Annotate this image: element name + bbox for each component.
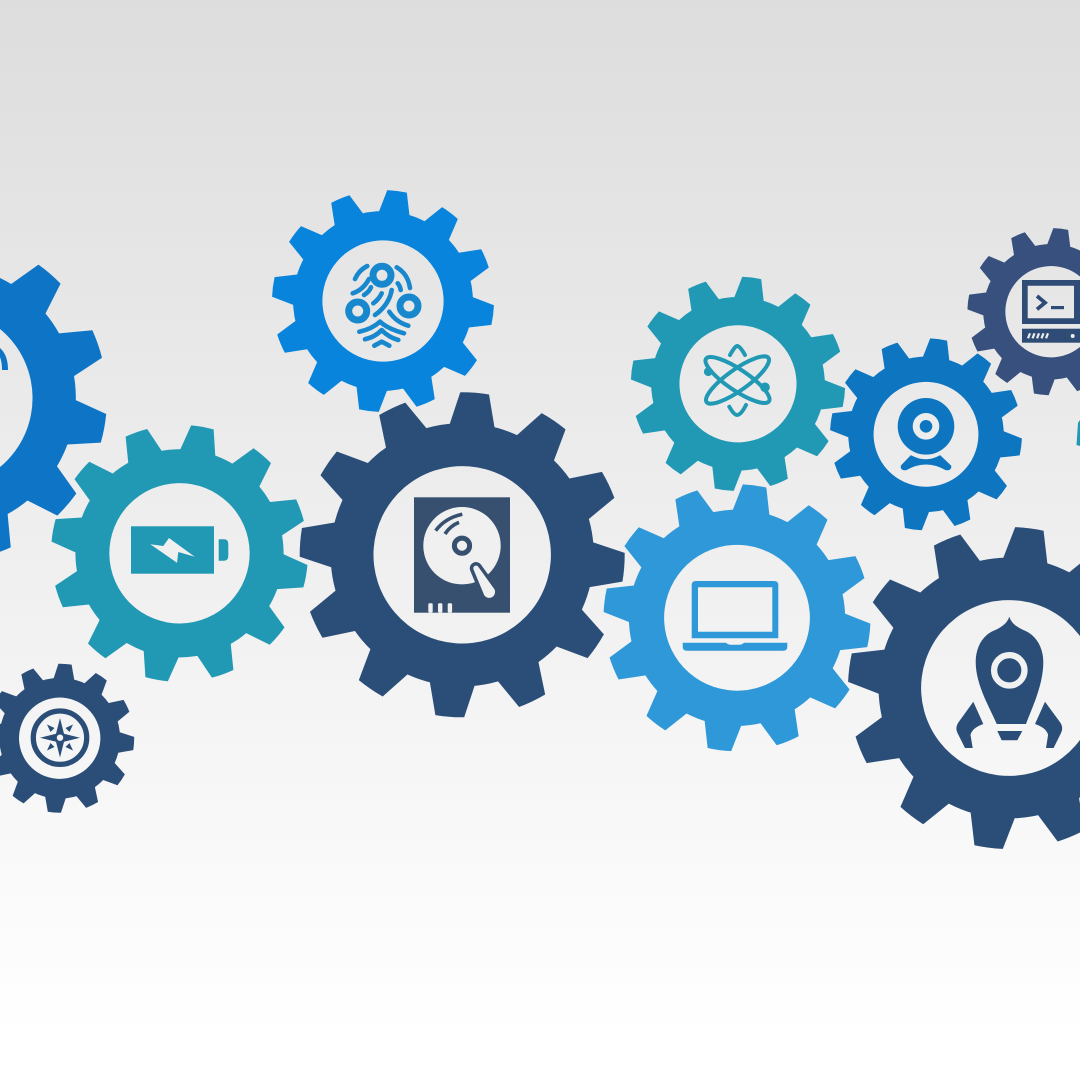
gear: webcam bbox=[818, 326, 1034, 542]
icon: atom bbox=[700, 346, 775, 415]
gear: laptop bbox=[587, 468, 887, 768]
gear: terminal bbox=[958, 219, 1080, 404]
icon: fingerprint bbox=[349, 266, 418, 346]
icon: laptop bbox=[683, 581, 787, 651]
gear: compass bbox=[0, 659, 139, 818]
icon: battery bbox=[131, 526, 228, 574]
icon: webcam bbox=[898, 398, 954, 470]
gear: fingerprint bbox=[259, 177, 507, 425]
gear: battery bbox=[30, 404, 329, 703]
gear: atom bbox=[618, 264, 858, 504]
gear: rocket bbox=[829, 508, 1080, 868]
gear: large blue partial at left edge bbox=[0, 206, 135, 590]
icon: hard drive bbox=[414, 497, 510, 613]
icon: compass bbox=[33, 711, 87, 764]
gear fragment: teal tooth at right edge bbox=[1076, 420, 1080, 446]
gear: hard drive bbox=[288, 380, 637, 729]
icon: partial arc inside left gear bbox=[0, 348, 8, 370]
icon: rocket bbox=[956, 617, 1062, 748]
icon: terminal computer bbox=[1022, 280, 1080, 343]
